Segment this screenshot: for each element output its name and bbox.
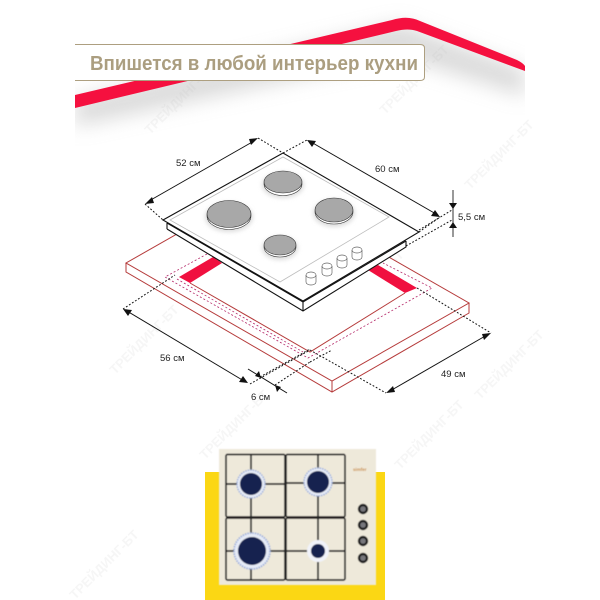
dimension: 52 cm <box>145 138 258 204</box>
gas burner 2 <box>304 468 332 496</box>
dimension: 60 cm <box>307 140 440 217</box>
dimension guides <box>123 138 491 393</box>
grate <box>226 454 345 580</box>
brand logo: simfer <box>353 467 367 472</box>
dimension: 5.5 cm <box>449 190 485 237</box>
gas burner 4 <box>307 540 329 562</box>
dimension: 56 cm <box>123 309 248 383</box>
watermarks: ТРЕЙДИНГ-БТ <box>332 247 407 322</box>
gas burner 3 <box>234 533 270 569</box>
gas burner 1 <box>237 470 265 498</box>
watermarks: ТРЕЙДИНГ-БТ <box>472 327 547 402</box>
watermarks: ТРЕЙДИНГ-БТ <box>377 42 452 117</box>
watermarks: ТРЕЙДИНГ-БТ <box>392 397 467 472</box>
title: Впишется в любой интерьер кухни <box>90 53 418 75</box>
dimension: 52 cm: 52 см <box>176 158 200 169</box>
burner: top <box>262 171 304 198</box>
burner: right <box>313 198 355 227</box>
knobs <box>306 247 362 285</box>
watermarks: ТРЕЙДИНГ-БТ <box>142 62 217 137</box>
inner outline <box>170 157 389 282</box>
dimension: 6 cm <box>248 369 287 403</box>
watermarks: ТРЕЙДИНГ-БТ <box>107 302 182 377</box>
watermarks: ТРЕЙДИНГ-БТ <box>222 197 297 272</box>
red roof band with shadow <box>75 18 525 126</box>
burner: large <box>205 200 253 232</box>
watermarks: ТРЕЙДИНГ-БТ <box>462 117 537 192</box>
dimension: 49 cm: 49 см <box>441 369 466 380</box>
dimension: 5.5 cm: 5,5 см <box>458 212 485 223</box>
cutout dashed edges <box>165 254 432 358</box>
burner: bottom <box>262 235 298 260</box>
hob <box>163 153 419 311</box>
cutout solid edge <box>190 283 405 352</box>
red strips <box>179 257 417 293</box>
watermarks: ТРЕЙДИНГ-БТ <box>67 527 142 600</box>
dimension: 56 cm: 56 см <box>160 353 184 364</box>
title banner <box>75 44 424 80</box>
dimension: 60 cm: 60 см <box>375 164 400 175</box>
dimension: 6 cm: 6 см <box>251 392 270 403</box>
yellow backdrop <box>205 472 385 600</box>
control knobs <box>359 505 367 562</box>
hob photo <box>219 449 376 585</box>
watermarks: ТРЕЙДИНГ-БТ <box>197 387 272 462</box>
watermarks <box>67 42 547 600</box>
countertop with cutout <box>126 185 469 392</box>
dimension: 49 cm <box>386 333 491 393</box>
